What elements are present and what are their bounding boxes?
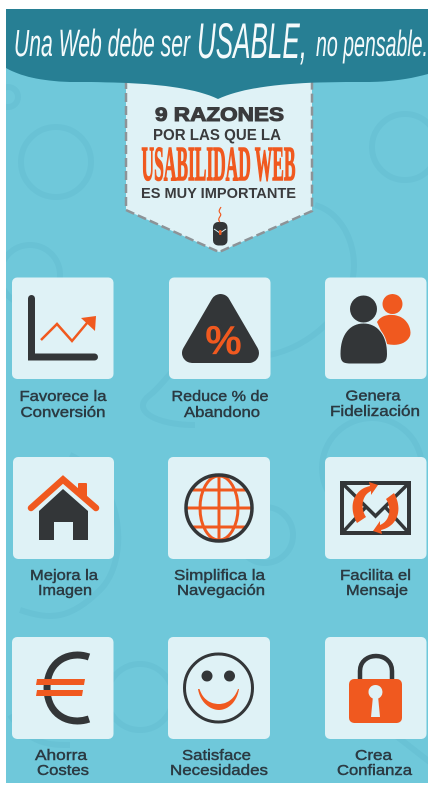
panel: card abandono xyxy=(169,278,270,421)
label: Favorece la xyxy=(20,389,108,405)
icon: padlock xyxy=(349,656,402,723)
label: Simplifica la xyxy=(174,568,266,584)
label: Facilita el xyxy=(340,568,411,584)
text: 9 razones: 9 RAZONES xyxy=(155,105,284,126)
label: Ahorra xyxy=(35,748,88,764)
panel: card costes: Costes xyxy=(37,763,89,779)
icon: envelope with arrows xyxy=(342,482,409,534)
label: Crea xyxy=(355,748,393,764)
title: USABLE, xyxy=(197,13,307,69)
icon: euro xyxy=(36,655,89,721)
panel: card necesidades xyxy=(168,637,270,779)
icon: growth chart xyxy=(32,298,96,357)
label: Mejora la xyxy=(30,568,99,584)
panel: card imagen xyxy=(13,457,114,599)
panel: card costes xyxy=(12,637,114,779)
panel: card imagen: Imagen xyxy=(38,583,92,599)
panel: card conversion: Conversión xyxy=(20,405,106,421)
ribbon: dashed label xyxy=(126,78,312,252)
label: Genera xyxy=(346,388,402,404)
icon: people xyxy=(340,294,410,364)
panel: card confianza xyxy=(325,637,426,779)
panel: card navegacion: Navegación xyxy=(177,583,265,599)
icon: globe xyxy=(184,474,254,542)
panel: card fidelizacion: Fidelización xyxy=(330,404,420,420)
panel: card mensaje xyxy=(325,457,426,599)
text: es muy importante: ES MUY IMPORTANTE xyxy=(141,185,296,202)
icon: mouse xyxy=(213,207,228,246)
banner: title band xyxy=(6,9,428,99)
icon: house xyxy=(31,480,96,540)
panel: card conversion xyxy=(12,278,114,421)
label: Reduce % de xyxy=(172,389,268,405)
panel: card mensaje: Mensaje xyxy=(346,583,408,599)
panel: card abandono: Abandono xyxy=(184,405,260,421)
label: Satisface xyxy=(182,748,251,764)
icon: percent triangle xyxy=(192,304,249,363)
panel: card confianza: Confianza xyxy=(337,763,413,779)
text: por las que la: POR LAS QUE LA xyxy=(153,127,281,144)
panel: card navegacion xyxy=(168,457,270,599)
icon: smiley xyxy=(184,654,252,722)
title xyxy=(14,13,428,69)
title: Una Web debe ser xyxy=(14,23,191,65)
panel: card necesidades: Necesidades xyxy=(170,763,268,779)
panel: card fidelizacion xyxy=(325,278,426,420)
icon: percent triangle: % xyxy=(205,317,242,363)
